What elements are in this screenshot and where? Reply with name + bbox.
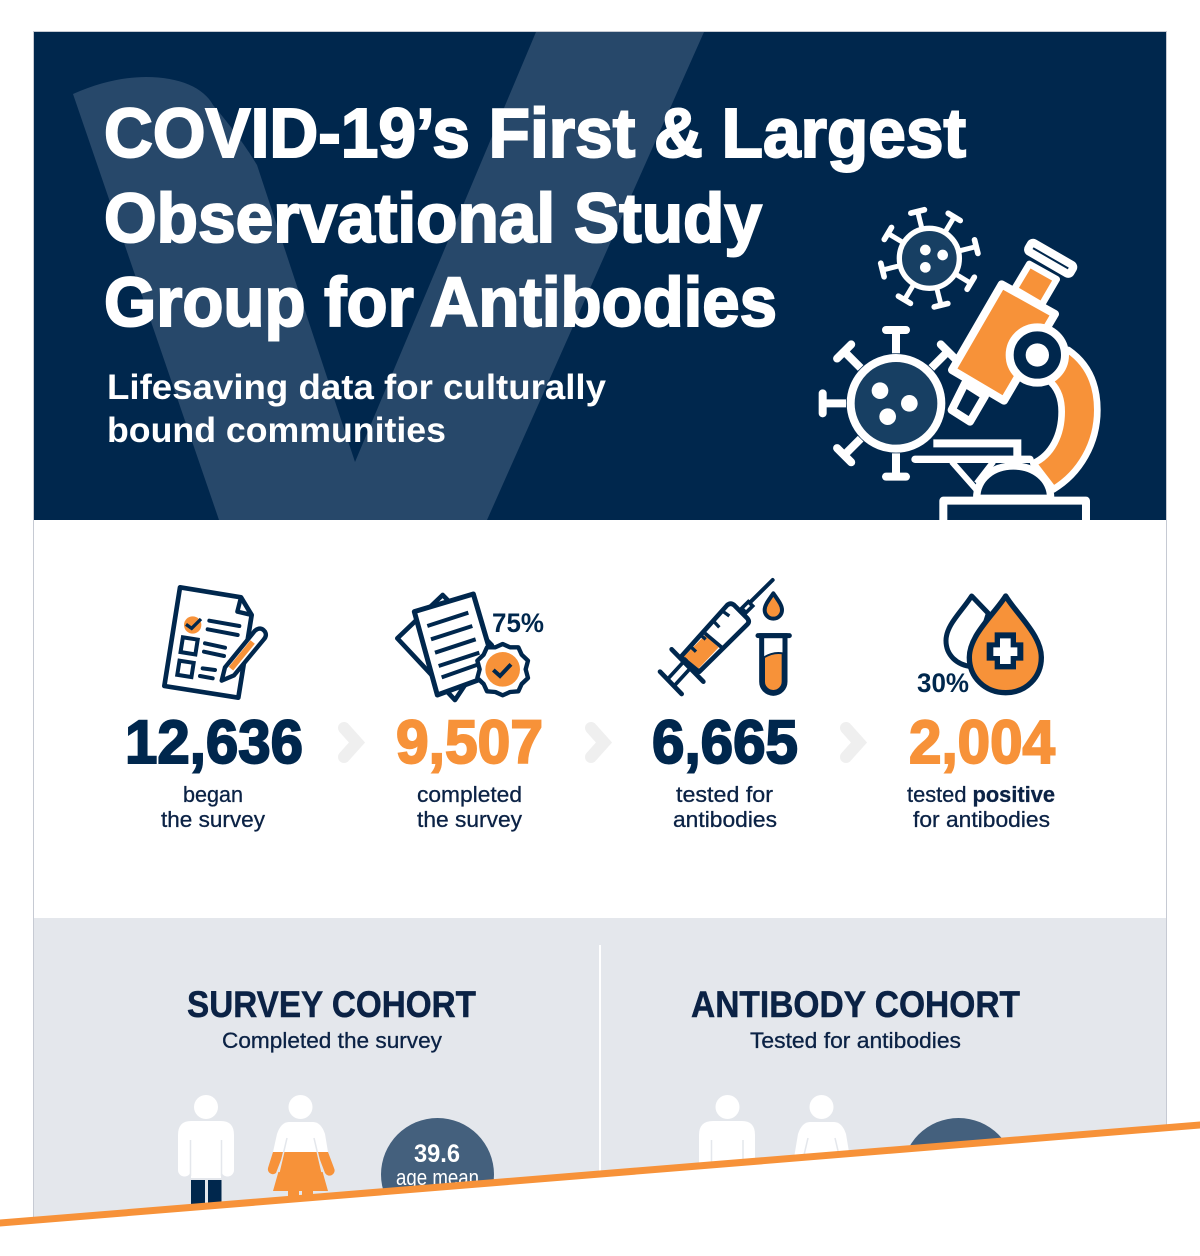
focus knob	[1010, 327, 1065, 383]
panel: cohorts	[34, 918, 1166, 1248]
panel: funnel stats	[125, 580, 1055, 832]
drop	[765, 593, 782, 619]
stat: 6,665 tested for antibodies: antibodies	[673, 807, 777, 832]
microscope arm	[1033, 350, 1097, 489]
label: 30%: 30%	[917, 668, 969, 698]
heading: antibody cohort: ANTIBODY COHORT	[691, 984, 1020, 1025]
heading: survey cohort: SURVEY COHORT	[187, 984, 476, 1025]
stat: 12,636 began the survey: 12,636	[125, 708, 303, 776]
pencil	[222, 629, 266, 681]
stat: 2,004 tested positive: tested positive	[907, 782, 1055, 807]
heading: survey cohort	[187, 984, 476, 1053]
small virus	[881, 210, 978, 307]
objective	[952, 383, 985, 422]
arrow 3	[846, 728, 859, 757]
body	[952, 284, 1055, 401]
panel: header	[34, 32, 1166, 530]
icon: antibody woman	[792, 1095, 852, 1172]
base	[943, 501, 1086, 527]
eyepiece	[1027, 242, 1074, 275]
stat: age mean survey	[381, 1118, 494, 1231]
arrow 1	[344, 728, 357, 757]
title	[104, 94, 966, 341]
heading: antibody cohort: Tested for antibodies	[750, 1028, 961, 1053]
stat: 2,004 tested positive	[907, 708, 1055, 832]
stat: 9,507 completed the survey: the survey	[417, 807, 522, 832]
icon: survey woman	[268, 1095, 335, 1210]
stat: 12,636 began the survey: began	[183, 782, 243, 807]
heading: antibody cohort	[691, 984, 1020, 1053]
stat: 6,665 tested for antibodies: tested for	[676, 782, 773, 807]
subtitle	[107, 368, 607, 450]
label: 75%: 75%	[492, 608, 544, 638]
tube	[762, 636, 785, 693]
icon: survey form	[164, 587, 266, 698]
title: COVID-19’s First & Largest	[104, 94, 966, 172]
icon: antibody man	[699, 1095, 755, 1200]
stat: age mean antibody	[902, 1118, 1015, 1231]
title: Observational Study	[104, 179, 762, 257]
stat: 6,665 tested for antibodies: 6,665	[652, 708, 798, 776]
heading: survey cohort: Completed the survey	[222, 1028, 442, 1053]
icon: papers with badge	[397, 594, 528, 700]
neck	[1014, 264, 1057, 305]
stat: 2,004 tested positive: 2,004	[909, 708, 1055, 776]
title: Group for Antibodies	[104, 263, 777, 341]
stat: age mean survey: age mean	[396, 1165, 479, 1190]
dome	[977, 466, 1051, 498]
stat: 6,665 tested for antibodies	[652, 708, 798, 832]
stage	[933, 443, 1017, 457]
diagonal torn edge	[0, 1125, 1200, 1256]
subtitle: Lifesaving data for culturally	[107, 368, 607, 407]
subtitle: bound communities	[107, 411, 446, 450]
stat: 9,507 completed the survey	[396, 708, 543, 832]
large virus	[823, 330, 955, 477]
arrow 2	[591, 728, 604, 757]
stat: 2,004 tested positive: for antibodies	[913, 807, 1050, 832]
stat: 12,636 began the survey: the survey	[161, 807, 265, 832]
stat: age mean survey: 39.6	[414, 1140, 460, 1168]
icon: blood drops	[946, 596, 1041, 693]
icon: microscope and viruses	[823, 210, 1097, 530]
stat: 12,636 began the survey	[125, 708, 303, 832]
icon: syringe and test tube	[660, 580, 789, 694]
stat: 9,507 completed the survey: 9,507	[396, 708, 543, 776]
watermark V	[73, 32, 704, 520]
stat: 9,507 completed the survey: completed	[417, 782, 522, 807]
icon: survey man	[178, 1095, 234, 1220]
